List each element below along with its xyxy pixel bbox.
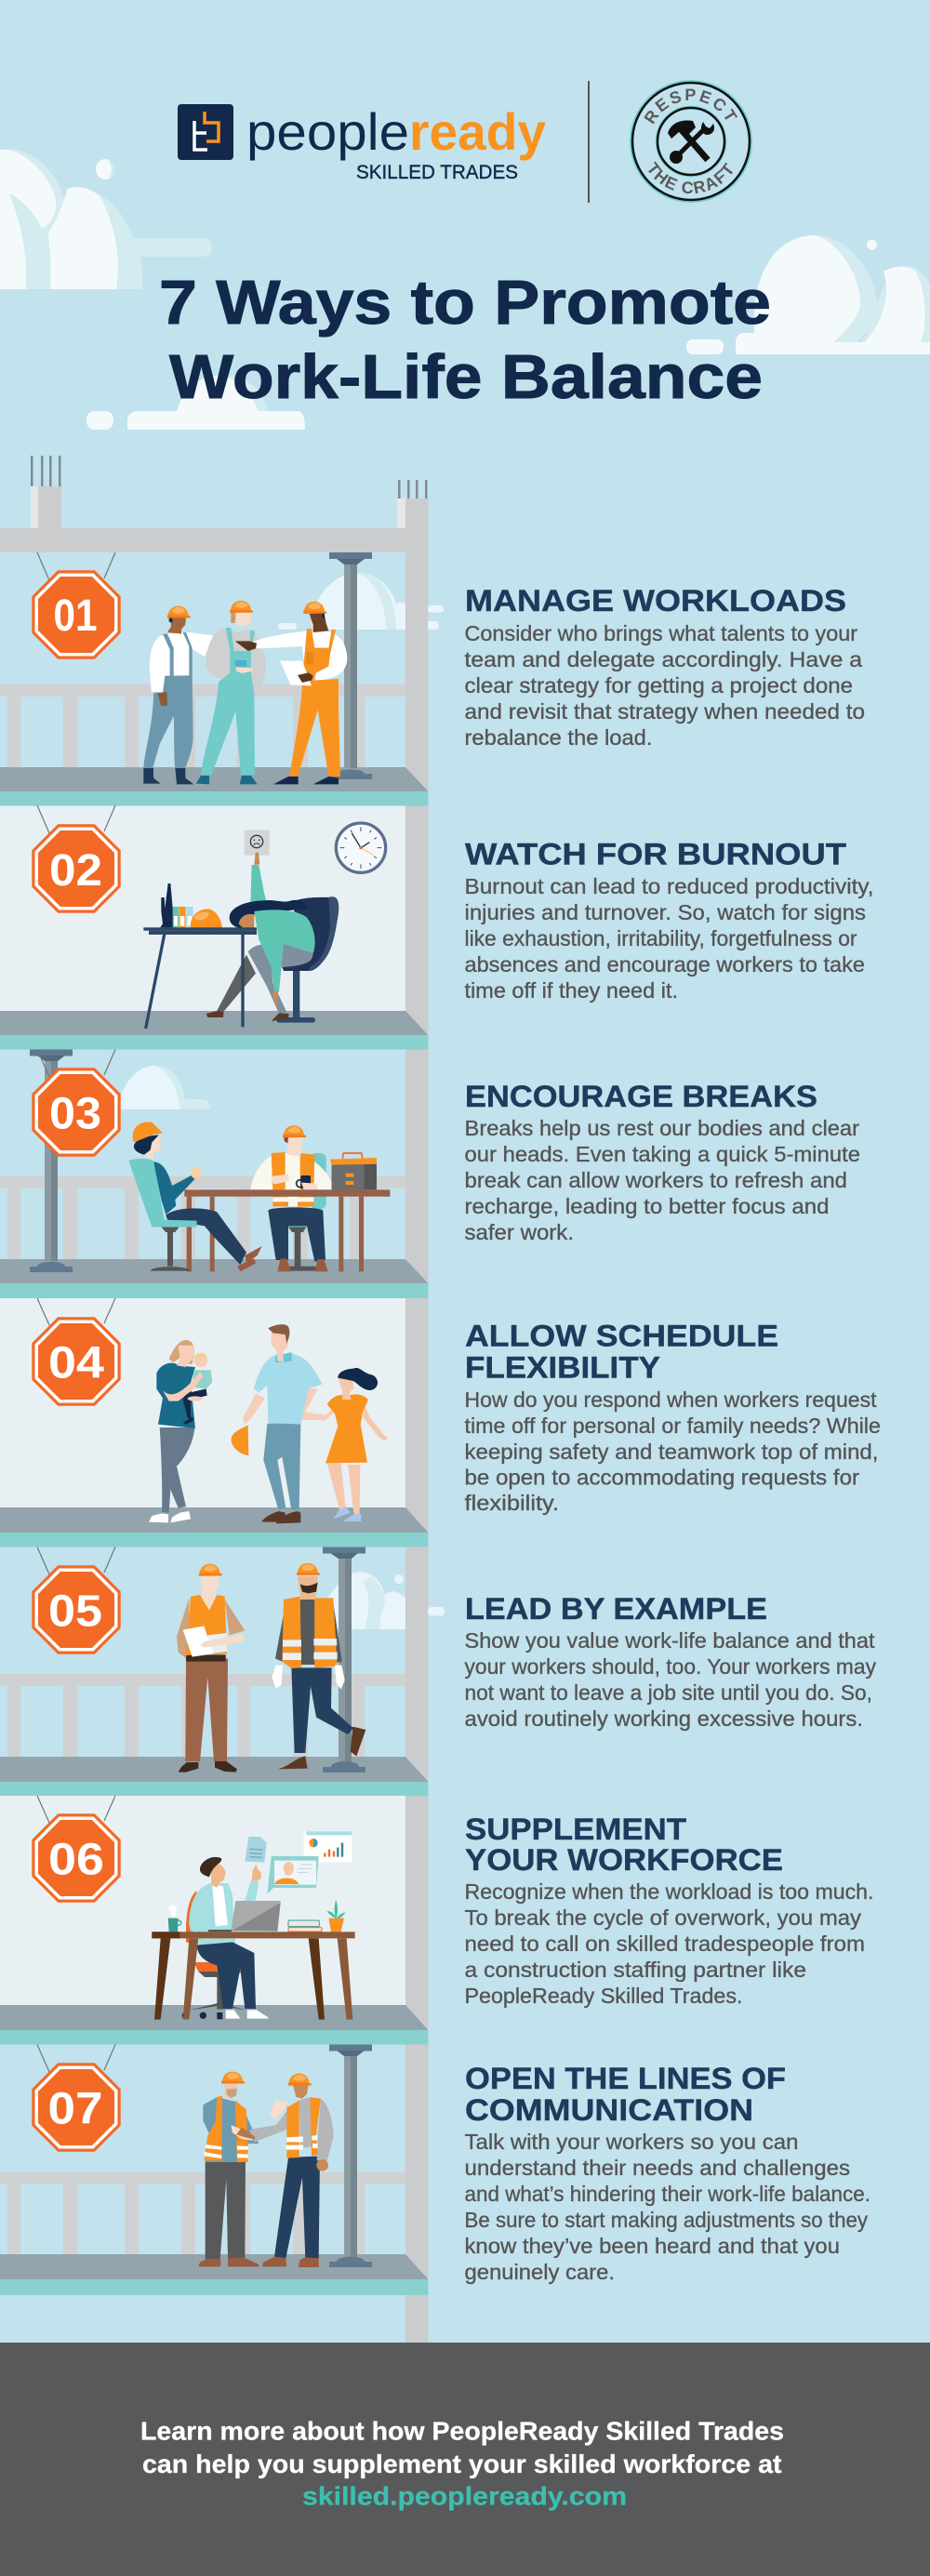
support pole <box>30 1049 73 1272</box>
body 1: team and delegate accordingly. Have a <box>465 647 862 671</box>
floor edge <box>0 2279 428 2295</box>
footer text: can help you supplement your skilled workforce at <box>142 2450 782 2478</box>
plant <box>327 1900 345 1932</box>
laptop <box>208 1901 281 1932</box>
floor edge <box>0 1035 428 1049</box>
floating video call <box>267 1856 319 1894</box>
body 4: flexibility. <box>465 1491 559 1515</box>
desk items: monitor <box>160 883 176 927</box>
sign 05: 05 <box>48 1587 102 1637</box>
panel 5: lead by example <box>0 1547 445 1797</box>
body 7: Be sure to start making adjustments so they <box>465 2208 868 2232</box>
body 5: not want to leave a job site until you do. So, <box>465 1680 872 1705</box>
toolbox <box>330 1153 377 1189</box>
left rebar <box>31 456 61 486</box>
text block 1 <box>465 584 865 750</box>
wordmark accent: ready <box>409 102 546 161</box>
floor edge <box>0 1533 428 1547</box>
text block 6 <box>465 1812 874 2008</box>
body 7: and what’s hindering their work-life balance. <box>465 2182 870 2206</box>
body 2 <box>465 874 874 1003</box>
room wall <box>0 1298 405 1507</box>
railing <box>0 1176 405 1259</box>
footer background <box>0 2343 930 2576</box>
body 6 <box>465 1879 874 2008</box>
body 4: time off for personal or family needs? While <box>465 1414 881 1438</box>
railing <box>0 1674 405 1757</box>
body 1: rebalance the load. <box>465 725 653 750</box>
father with hard hat <box>232 1324 335 1523</box>
body 4: be open to accommodating requests for <box>465 1466 859 1490</box>
text block 2 <box>465 837 874 1003</box>
workers: three people talking <box>143 601 347 784</box>
supervisor in vest leaning <box>272 1563 365 1769</box>
floating chart card <box>304 1831 352 1863</box>
support pole <box>329 2044 372 2267</box>
floor slab <box>0 2254 428 2279</box>
scene: workers shaking hands <box>198 2072 333 2267</box>
sign 07 <box>32 2063 121 2152</box>
sign 02 <box>32 824 121 913</box>
floor edge <box>0 2030 428 2044</box>
body 2: time off if they need it. <box>465 978 678 1003</box>
floor edge <box>0 1283 428 1298</box>
badge: respect the craft <box>630 80 752 203</box>
body 6: To break the cycle of overwork, you may <box>465 1905 862 1930</box>
logo divider <box>588 81 590 203</box>
floor edge <box>0 791 428 805</box>
body 2: like exhaustion, irritability, forgetfulness or <box>465 926 857 950</box>
floor edge <box>0 1782 428 1797</box>
sign hanger <box>37 2044 115 2072</box>
sign hanger <box>37 1298 115 1325</box>
title <box>159 268 771 412</box>
daughter in orange dress <box>326 1368 389 1521</box>
sign 06 <box>32 1813 121 1903</box>
body 1: Consider who brings what talents to your <box>465 621 857 645</box>
handshake <box>231 2125 255 2142</box>
heading 7: OPEN THE LINES OF <box>465 2062 786 2095</box>
panel 3: encourage breaks <box>0 1049 428 1298</box>
footer text: skilled.peopleready.com <box>302 2481 627 2511</box>
room wall <box>0 1796 405 2005</box>
heading 4 <box>465 1319 778 1384</box>
body 3: our heads. Even taking a quick 5-minute <box>465 1142 860 1166</box>
body 4: How do you respond when workers request <box>465 1388 877 1412</box>
worker left <box>198 2072 288 2266</box>
desk <box>152 1932 355 2020</box>
panel 2: watch for burnout <box>0 805 428 1049</box>
right rebar <box>398 480 428 498</box>
right column <box>397 498 428 2343</box>
sub brand: SKILLED TRADES <box>356 162 518 183</box>
body 5: avoid routinely working excessive hours. <box>465 1706 863 1731</box>
title: Work-Life Balance <box>169 342 763 412</box>
chair left pedestal <box>151 1227 191 1271</box>
chair <box>276 896 339 1023</box>
panel 1: manage workloads <box>0 552 444 805</box>
sign 02: 02 <box>49 846 102 896</box>
cloud behind pole <box>278 573 444 630</box>
chair right <box>282 1153 326 1271</box>
worker middle, teal overalls <box>196 601 266 784</box>
logo: peopleready skilled trades <box>178 102 546 183</box>
cloud: top left <box>0 149 212 289</box>
manager <box>189 1857 268 2019</box>
supervisor with clipboard <box>177 1564 245 1773</box>
text block 7 <box>465 2062 870 2284</box>
cloud <box>118 1066 210 1109</box>
badge text bottom: THE CRAFT <box>648 162 733 193</box>
sign hanger <box>37 1049 115 1077</box>
floor slab <box>0 1757 428 1782</box>
body 6: Recognize when the workload is too much. <box>465 1879 874 1904</box>
worker slumped <box>206 853 315 1021</box>
body 7 <box>465 2130 870 2284</box>
icon: sad face card <box>245 830 270 856</box>
sign 04: 04 <box>48 1339 104 1388</box>
footer text: Learn more about how PeopleReady Skilled Trades <box>140 2416 784 2446</box>
scene: manager at laptop <box>152 1831 355 2020</box>
logo mark <box>178 104 233 160</box>
heading 2: WATCH FOR BURNOUT <box>465 837 847 870</box>
worker left leaning back <box>128 1122 262 1271</box>
heading 4: ALLOW SCHEDULE <box>465 1319 778 1352</box>
body 3: recharge, leading to better focus and <box>465 1194 830 1218</box>
panel 6: supplement your workforce <box>0 1796 428 2044</box>
scene: family <box>149 1324 389 1523</box>
roof beam <box>0 528 428 552</box>
room wall <box>0 805 405 1012</box>
badge text top: RESPECT <box>644 89 737 125</box>
text block 5 <box>465 1592 876 1731</box>
sign 03 <box>32 1068 121 1157</box>
sign 01: 01 <box>54 591 97 641</box>
floor slab <box>0 1259 428 1283</box>
floating document <box>245 1837 267 1863</box>
floor slab <box>0 767 428 791</box>
sign 05 <box>32 1565 121 1654</box>
heading 7: COMMUNICATION <box>465 2093 753 2127</box>
heading 4: FLEXIBILITY <box>465 1350 660 1384</box>
body 6: PeopleReady Skilled Trades. <box>465 1984 742 2008</box>
sign hanger <box>37 1796 115 1823</box>
panel 7: open the lines of communication <box>0 2044 428 2295</box>
chair <box>182 1891 246 2019</box>
body 6: need to call on skilled tradespeople from <box>465 1932 865 1956</box>
body 7: Talk with your workers so you can <box>465 2130 798 2154</box>
body 3 <box>465 1116 860 1244</box>
text block 4 <box>465 1319 881 1515</box>
title: 7 Ways to Promote <box>159 268 771 338</box>
heading 7 <box>465 2062 786 2127</box>
mother with baby <box>149 1340 212 1522</box>
support pole <box>323 1547 365 1773</box>
text block 3 <box>465 1080 860 1244</box>
sign hanger <box>37 805 115 833</box>
heading 3: ENCOURAGE BREAKS <box>465 1080 817 1113</box>
body 1: clear strategy for getting a project done <box>465 673 853 697</box>
body 7: understand their needs and challenges <box>465 2156 850 2180</box>
body 4: keeping safety and teamwork top of mind, <box>465 1440 878 1464</box>
support pole <box>329 552 372 779</box>
body 6: a construction staffing partner like <box>465 1958 806 1982</box>
table <box>184 1189 390 1271</box>
scene: two supervisors <box>177 1563 365 1773</box>
sign 03: 03 <box>49 1090 101 1138</box>
footer text <box>140 2416 784 2511</box>
sign hanger <box>37 1547 115 1574</box>
sign 06: 06 <box>48 1836 104 1884</box>
heading 6: SUPPLEMENT <box>465 1812 686 1846</box>
heading 5: LEAD BY EXAMPLE <box>465 1592 767 1626</box>
panel 4: allow schedule flexibility <box>0 1298 428 1547</box>
scene: two workers on break at table <box>128 1122 390 1271</box>
sign 01 <box>32 570 121 659</box>
mug <box>168 1905 181 1932</box>
building structure <box>0 456 428 2343</box>
body 1: and revisit that strategy when needed to <box>465 699 865 724</box>
worker left, blue overalls <box>143 606 213 784</box>
body 7: genuinely care. <box>465 2260 615 2284</box>
worker right with vest <box>250 1125 334 1271</box>
icon: wall clock <box>334 821 388 874</box>
railing <box>0 2172 405 2254</box>
floor slab <box>0 1011 428 1035</box>
floor slab <box>0 1507 428 1533</box>
books <box>288 1920 322 1932</box>
body 2: Burnout can lead to reduced productivity, <box>465 874 874 898</box>
heading 6 <box>465 1812 783 1877</box>
railing <box>0 684 405 767</box>
heading 6: YOUR WORKFORCE <box>465 1843 783 1877</box>
sign 07: 07 <box>48 2085 102 2133</box>
cloud: top right <box>686 235 930 354</box>
cloud: behind title <box>86 375 305 430</box>
worker right, orange overalls <box>235 602 347 784</box>
body 5: Show you value work-life balance and that <box>465 1628 875 1653</box>
body 4 <box>465 1388 881 1515</box>
body 7: know they’ve been heard and that you <box>465 2234 840 2258</box>
heading 1: MANAGE WORKLOADS <box>465 584 846 617</box>
sign 04 <box>32 1317 121 1406</box>
cloud <box>317 1572 445 1629</box>
wordmark: people <box>246 102 409 161</box>
desk items: hard hat <box>191 909 222 931</box>
sign hanger <box>37 552 115 580</box>
body 3: safer work. <box>465 1220 574 1244</box>
footer panel <box>0 2343 930 2576</box>
floor slab <box>0 2005 428 2030</box>
body 2: injuries and turnover. So, watch for signs <box>465 900 866 924</box>
body 5 <box>465 1628 876 1731</box>
body 3: Breaks help us rest our bodies and clear <box>465 1116 859 1140</box>
icon: hammer and wrench <box>668 121 714 164</box>
desk items: binders <box>173 907 193 927</box>
body 5: your workers should, too. Your workers may <box>465 1654 876 1679</box>
body 1 <box>465 621 865 750</box>
body 2: absences and encourage workers to take <box>465 952 865 976</box>
worker right <box>249 2074 333 2267</box>
left stub column <box>31 486 61 528</box>
scene: worker burned out at desk <box>143 821 388 1029</box>
body 3: break can allow workers to refresh and <box>465 1168 847 1192</box>
desk <box>143 927 257 1029</box>
